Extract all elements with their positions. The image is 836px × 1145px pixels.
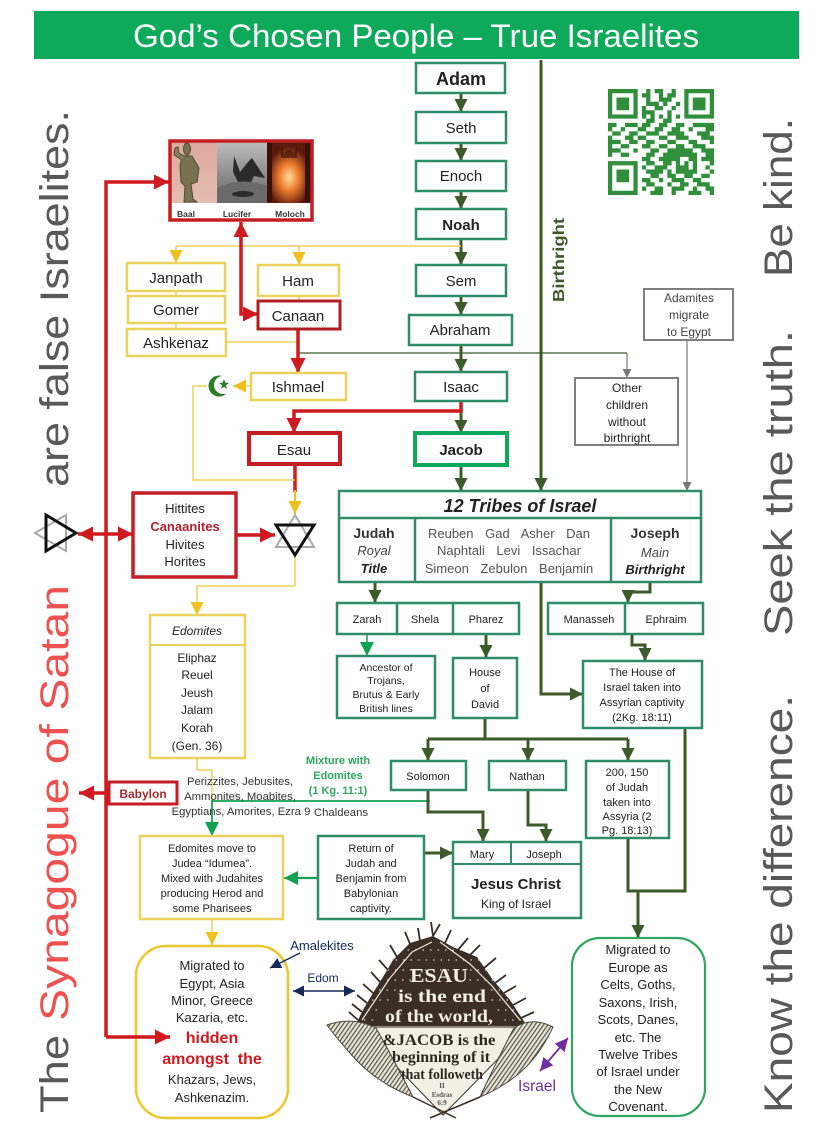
box: House of David — [453, 658, 517, 718]
text: nations list: Perizzites, Jebusites, — [187, 776, 293, 788]
panel: Edomites: Eliphaz — [177, 651, 217, 665]
panel: 12 Tribes of Israel: 12 Tribes of Israel — [444, 496, 597, 516]
box: Sem: Sem — [446, 273, 476, 290]
panel: Migrated to Egypt: Ashkenazim. — [175, 1090, 249, 1105]
box: Seth — [416, 112, 506, 143]
box: Solomon: Solomon — [406, 771, 450, 783]
text: nations list — [172, 776, 368, 819]
box: Canaan — [258, 301, 340, 329]
emblem: Esau and Jacob: II — [439, 1082, 445, 1090]
label: Amalekites — [270, 938, 354, 968]
panel: Migrated to Egypt: Migrated to — [179, 958, 245, 973]
panel: Baal Lucifer Moloch — [170, 141, 312, 220]
box: Hittites and Canaanites: Hivites — [165, 537, 205, 552]
text: nations list: Chaldeans — [314, 807, 368, 819]
label: Israel arrow: Israel — [518, 1078, 556, 1095]
text: nations list: Ammonites, Moabites, — [184, 791, 296, 803]
box: Adam — [416, 63, 505, 93]
left vertical slogan: are false Israelites. — [33, 110, 77, 487]
box: Enoch: Enoch — [440, 168, 482, 185]
dots: starry field — [357, 950, 524, 1020]
box: House of David: of — [480, 683, 491, 695]
cell: other tribes: Simeon Zebulon Benjamin — [425, 561, 593, 576]
box: Manasseh Ephraim: Manasseh — [564, 614, 614, 626]
cell: Judah: Royal — [357, 543, 392, 558]
left vertical slogan: Synagogue of Satan — [33, 585, 77, 1021]
cell: Joseph: Birthright — [625, 562, 685, 577]
panel: Edomites: (Gen. 36) — [172, 739, 222, 753]
box: Nathan — [489, 761, 566, 790]
box: Adamites migrate to Egypt: to Egypt — [667, 325, 712, 339]
box: House of Israel captivity: Assyrian captivity — [600, 697, 685, 709]
connectors: main lineage arrows — [460, 93, 462, 491]
box: Ashkenaz: Ashkenaz — [143, 335, 209, 352]
panel: Edomites: Korah — [181, 721, 213, 735]
panel: Migrated to Egypt — [136, 946, 288, 1118]
icon: crescent and star — [208, 376, 232, 396]
cell: Judah: Judah — [353, 525, 395, 541]
emblem: Esau and Jacob: 6:9 — [437, 1099, 447, 1107]
cell: other tribes: Naphtali Levi Issachar — [437, 543, 582, 558]
emblem: Esau and Jacob: ESAU — [410, 965, 468, 987]
box: Isaac — [415, 372, 507, 401]
box: Edomites move to Judea: Judea “Idumea”. — [172, 858, 252, 870]
box: Jesus Christ — [453, 842, 581, 918]
cell: other tribes — [425, 526, 593, 576]
emblem: Esau and Jacob: Esdras — [432, 1091, 453, 1099]
panel: Migrated to Europe: Covenant. — [608, 1099, 668, 1114]
emblem: Esau and Jacob: &JACOB is the — [382, 1032, 496, 1049]
box: Edomites move to Judea — [140, 836, 283, 919]
title banner — [34, 11, 799, 59]
arrow: Adamites to Joseph — [686, 340, 688, 491]
sprigs: mountain edge — [349, 922, 534, 1020]
box: Jesus Christ: King of Israel — [481, 897, 551, 911]
box: Janpath — [127, 263, 225, 291]
connectors: yellow lines — [193, 386, 295, 945]
box: Noah: Noah — [442, 217, 480, 234]
box: Ancestor of Trojans: British lines — [359, 703, 413, 715]
box: Edomites move to Judea: some Pharisees — [173, 903, 252, 915]
cell: Judah — [353, 525, 395, 576]
label: Birthright: Birthright — [551, 217, 568, 302]
box: Edomites move to Judea: Mixed with Judahites — [161, 873, 264, 885]
panel: Migrated to Europe: etc. The — [615, 1030, 661, 1045]
box: Return of Judah and Benjamin: captivity. — [350, 903, 392, 915]
box: Manasseh Ephraim — [548, 603, 703, 634]
panel: Migrated to Europe — [572, 938, 705, 1116]
shape: dark mountain — [355, 936, 527, 1026]
title banner: God’s Chosen People – True Israelites — [133, 18, 699, 54]
label: Israel arrow — [518, 1038, 568, 1095]
connector: Abraham to other children — [298, 353, 627, 378]
box: House of Israel captivity: The House of — [609, 667, 676, 679]
box: House of Israel captivity: (2Kg. 18:11) — [612, 712, 672, 724]
panel: Migrated to Europe: Twelve Tribes — [598, 1047, 678, 1062]
emblem: Esau and Jacob: is the end — [398, 986, 486, 1006]
emblem: Esau and Jacob — [327, 922, 553, 1118]
shape: lower shield — [355, 1027, 527, 1115]
panel: Migrated to Europe: Celts, Goths, — [600, 977, 676, 992]
box: other children: children — [606, 398, 648, 412]
box: Babylon — [109, 782, 177, 804]
box: Sem — [416, 265, 506, 296]
icon: star of David left — [35, 515, 76, 551]
box: Zarah Shela Pharez: Zarah — [353, 614, 381, 626]
text: Mixture with Edomites: Mixture with — [306, 755, 370, 767]
panel: Edomites: Reuel — [181, 668, 213, 682]
box: Zarah Shela Pharez — [337, 603, 519, 634]
box: Esau: Esau — [277, 442, 311, 459]
icon: star of David right — [276, 515, 314, 555]
box: Ancestor of Trojans: Ancestor of — [359, 662, 413, 674]
panel: Edomites: Jalam — [181, 703, 213, 717]
box: Gomer: Gomer — [153, 302, 199, 319]
panel: Migrated to Europe: Saxons, Irish, — [599, 995, 677, 1010]
box: Isaac: Isaac — [443, 379, 479, 396]
box: Hittites and Canaanites: Canaanites — [150, 519, 220, 534]
panel: Migrated to Europe: Migrated to — [605, 942, 671, 957]
box: Edomites move to Judea: Edomites move to — [168, 843, 256, 855]
box: Hittites and Canaanites: Horites — [164, 554, 206, 569]
box: 200,150 of Judah: Assyria (2 — [603, 811, 651, 823]
box: Ancestor of Trojans: Trojans, — [367, 675, 405, 687]
shape: left feather — [327, 1021, 413, 1097]
panel: Migrated to Europe: Europe as — [608, 960, 668, 975]
box: 200,150 of Judah: Pg. 18:13) — [602, 825, 652, 837]
box: House of Israel captivity: Israel taken into — [603, 682, 681, 694]
figure: Baal statue — [174, 143, 199, 202]
right vertical slogan: Know the difference. — [757, 695, 801, 1113]
box: Seth: Seth — [446, 120, 476, 137]
box: Babylon: Babylon — [119, 787, 167, 801]
box: Abraham — [409, 315, 512, 345]
panel: Migrated to Egypt: Minor, Greece — [171, 993, 253, 1008]
text: nations list: Egyptians, Amorites, Ezra 9 — [172, 806, 310, 818]
box: Ancestor of Trojans — [337, 656, 435, 718]
emblem: Esau and Jacob: beginning of it — [392, 1049, 491, 1066]
box: Hittites and Canaanites: Hittites — [165, 501, 205, 516]
box: other children: Other — [612, 381, 642, 395]
cell: Joseph — [625, 525, 685, 577]
arrow: birthright line — [541, 60, 583, 694]
label: Amalekites: Amalekites — [290, 938, 354, 953]
panel: Migrated to Europe: Scots, Danes, — [598, 1012, 678, 1027]
box: House of David: David — [471, 699, 499, 711]
right vertical slogan — [757, 118, 801, 1113]
panel: 12 Tribes of Israel — [339, 491, 701, 582]
box: Ishmael — [251, 373, 346, 400]
panel: Baal Lucifer Moloch: Lucifer — [223, 209, 252, 219]
box: Edomites move to Judea: producing Herod and — [161, 888, 263, 900]
box: Adamites migrate to Egypt — [644, 289, 733, 340]
box: 200,150 of Judah: taken into — [603, 797, 651, 809]
box: Jesus Christ: Jesus Christ — [471, 876, 561, 893]
label: Edom arrow: Edom — [307, 971, 339, 985]
box: Return of Judah and Benjamin: Judah and — [345, 858, 397, 870]
panel: Migrated to Egypt: Kazaria, etc. — [176, 1010, 248, 1025]
left vertical slogan: The — [33, 1035, 77, 1113]
right vertical slogan: Seek the truth. — [757, 330, 801, 636]
box: House of David: House — [469, 667, 501, 679]
box: Abraham: Abraham — [430, 322, 490, 339]
text: Mixture with Edomites: (1 Kg. 11:1) — [309, 785, 368, 797]
connectors: tribes descendants — [375, 582, 685, 938]
box: Enoch — [416, 161, 506, 191]
panel: Edomites: Edomites — [172, 624, 222, 638]
panel: Migrated to Europe: the New — [614, 1082, 662, 1097]
box: other children: birthright — [604, 431, 651, 445]
shape: right feather — [480, 1022, 553, 1097]
panel: Baal Lucifer Moloch: Moloch — [275, 209, 305, 219]
box: Canaan: Canaan — [272, 308, 324, 325]
box: Nathan: Nathan — [509, 771, 545, 783]
panel: Migrated to Egypt: Khazars, Jews, — [168, 1072, 256, 1087]
box: Jacob — [415, 433, 507, 465]
box: Hittites and Canaanites — [133, 493, 236, 577]
connectors: green mixture and return — [212, 634, 430, 878]
box: Return of Judah and Benjamin — [318, 836, 424, 919]
connectors: Noah branches — [176, 246, 461, 342]
box: Manasseh Ephraim: Ephraim — [646, 614, 686, 626]
box: Zarah Shela Pharez: Pharez — [469, 614, 503, 626]
figure: Lucifer engraving — [217, 156, 267, 203]
panel: Migrated to Egypt: amongst the — [162, 1051, 262, 1068]
right vertical slogan: Be kind. — [757, 118, 801, 277]
box: Ham: Ham — [282, 273, 314, 290]
box: Adam: Adam — [436, 69, 486, 89]
panel: Baal Lucifer Moloch: Baal — [177, 209, 195, 219]
panel: Edomites — [150, 615, 245, 758]
box: other children: without — [607, 415, 647, 429]
box: Jacob: Jacob — [439, 442, 483, 459]
panel: Migrated to Egypt: hidden — [186, 1030, 238, 1047]
box: Ancestor of Trojans: Brutus & Early — [352, 689, 420, 701]
box: Ham — [258, 265, 339, 296]
text: Mixture with Edomites: Edomites — [313, 770, 363, 782]
box: Noah — [416, 209, 506, 239]
panel: Edomites: Jeush — [181, 686, 213, 700]
connectors: red lines — [78, 182, 461, 1037]
box: Return of Judah and Benjamin: Benjamin from — [336, 873, 406, 885]
cell: other tribes: Reuben Gad Asher Dan — [428, 526, 590, 541]
box: House of Israel captivity — [583, 661, 702, 728]
box: Ashkenaz — [127, 329, 226, 356]
box: Jesus Christ: Joseph — [526, 849, 562, 861]
box: Return of Judah and Benjamin: Return of — [348, 843, 395, 855]
label: Edom arrow — [293, 971, 355, 991]
box: Esau — [249, 433, 340, 464]
QR code — [608, 91, 714, 193]
emblem: Esau and Jacob: of the world, — [385, 1006, 493, 1026]
box: other children — [575, 378, 678, 445]
panel: Migrated to Europe: of Israel under — [596, 1064, 680, 1079]
arrow: to hidden — [106, 1035, 170, 1039]
box: Adamites migrate to Egypt: migrate — [669, 308, 709, 322]
box: Zarah Shela Pharez: Shela — [411, 614, 440, 626]
box: 200,150 of Judah: of Judah — [606, 782, 648, 794]
left vertical slogan — [33, 110, 77, 1113]
emblem: Esau and Jacob: that followeth — [401, 1067, 484, 1083]
box: Adamites migrate to Egypt: Adamites — [664, 291, 714, 305]
text: Mixture with Edomites — [306, 755, 370, 797]
figure: Moloch flames — [267, 143, 311, 202]
box: Gomer — [128, 296, 225, 323]
cell: Judah: Title — [361, 561, 387, 576]
cell: Joseph: Joseph — [630, 525, 680, 541]
box: Ishmael: Ishmael — [272, 379, 324, 396]
box: Janpath: Janpath — [149, 270, 203, 287]
cell: Joseph: Main — [641, 545, 669, 560]
box: 200,150 of Judah — [586, 761, 669, 838]
box: 200,150 of Judah: 200, 150 — [606, 767, 648, 779]
box: Solomon — [391, 761, 466, 790]
box: Jesus Christ: Mary — [470, 849, 495, 861]
panel: Migrated to Egypt: Egypt, Asia — [179, 976, 245, 991]
box: Return of Judah and Benjamin: Babylonian — [344, 888, 398, 900]
